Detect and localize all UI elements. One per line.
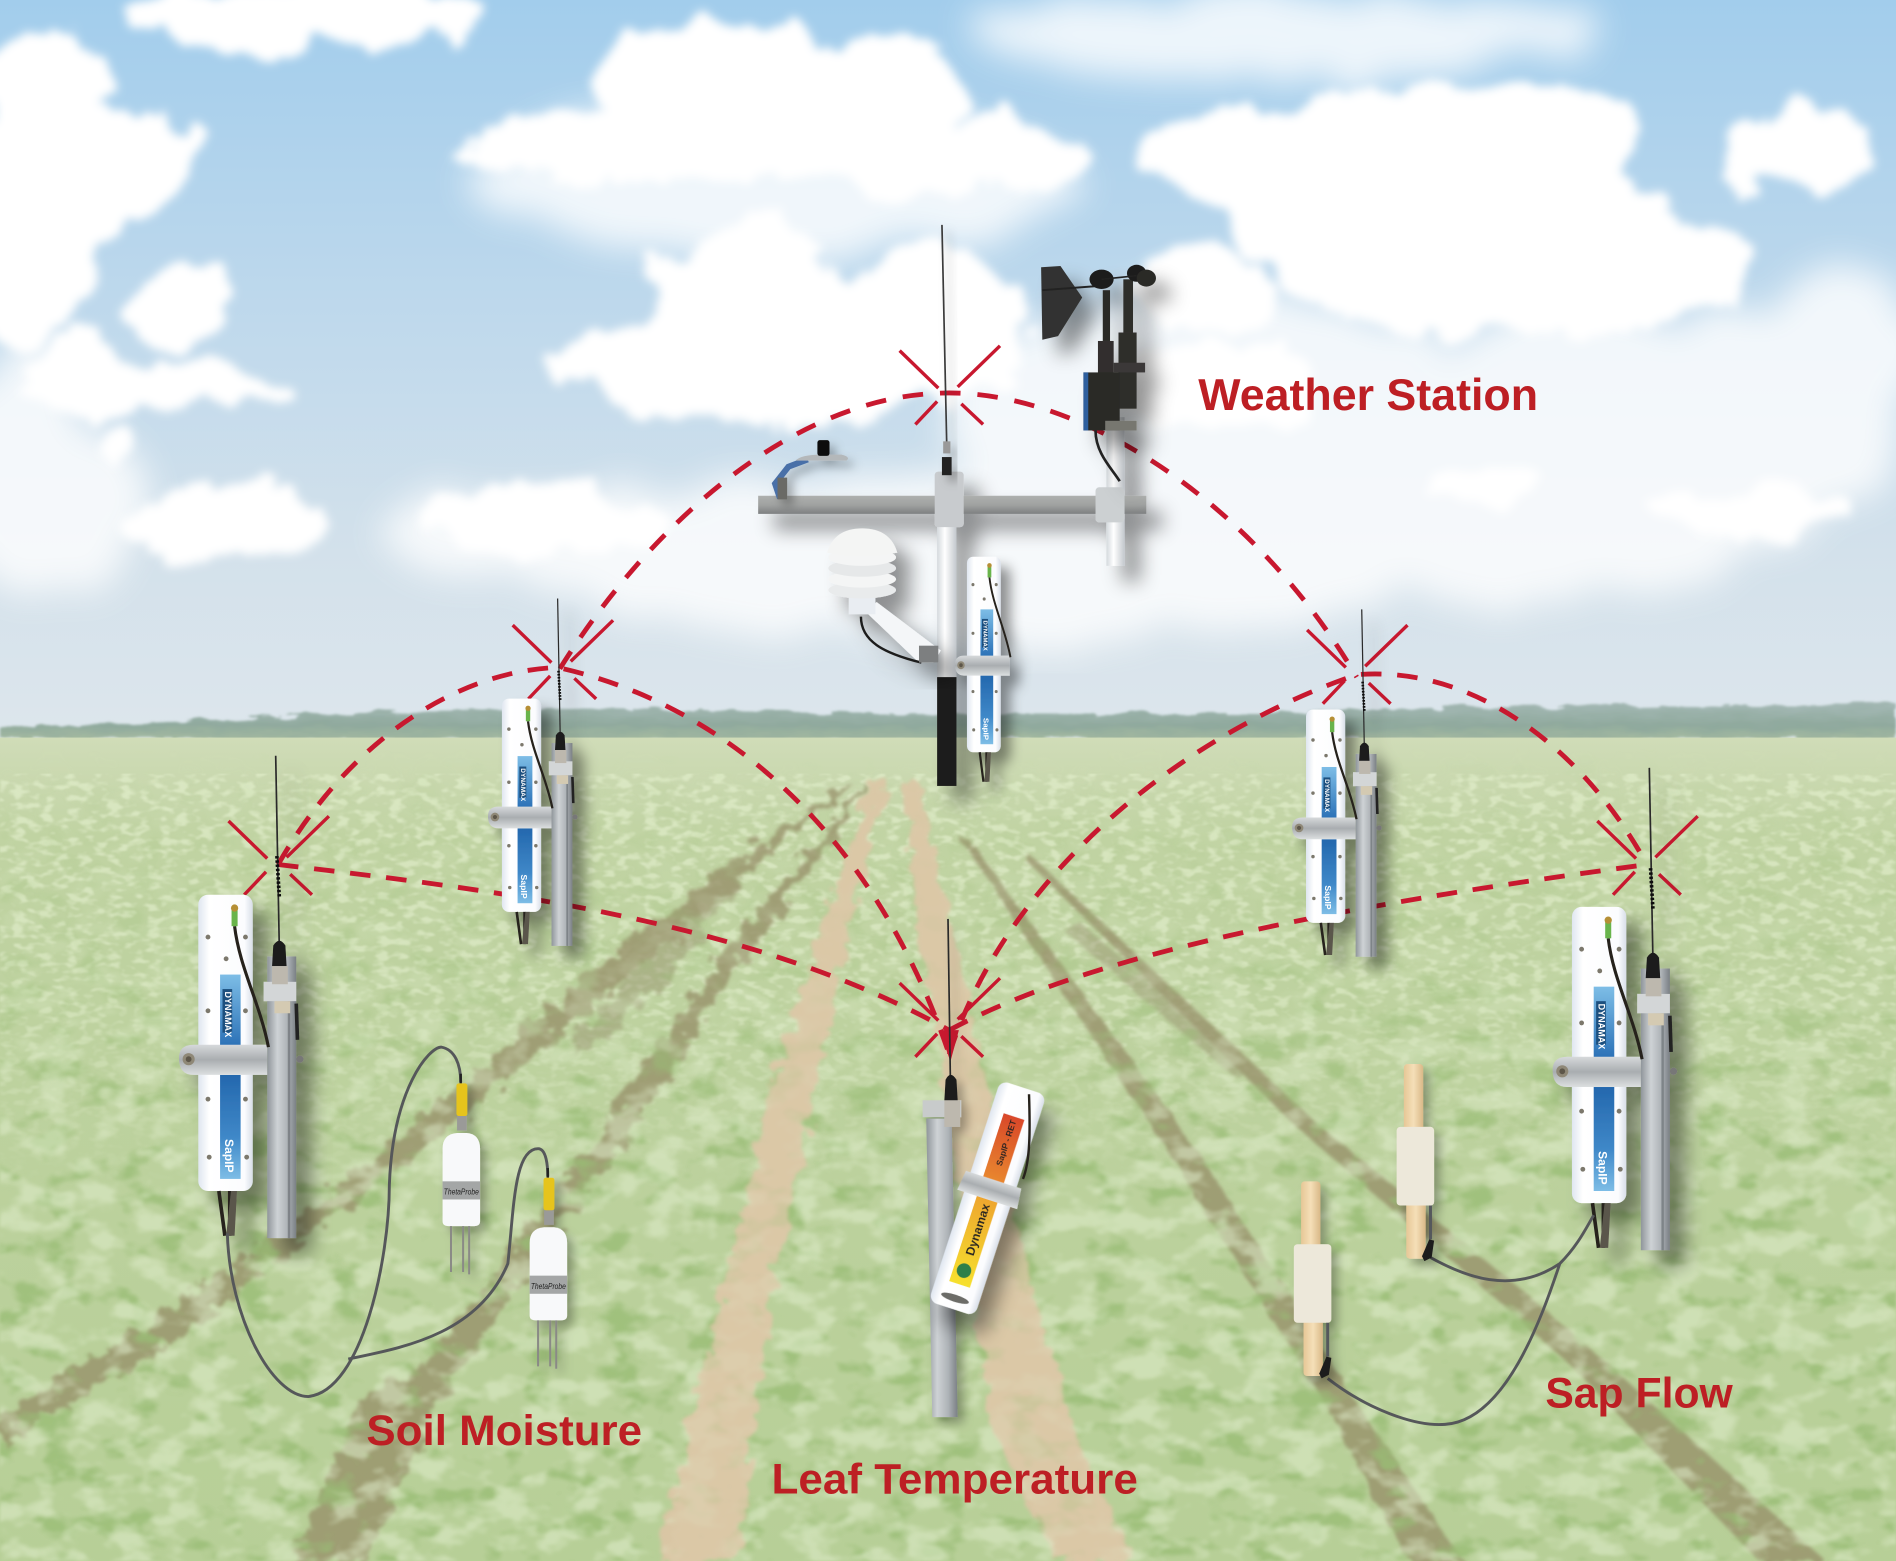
sap flow sensor 1 <box>1397 1064 1434 1261</box>
arrowhead at leaf node <box>940 1030 959 1062</box>
soil moisture probe 2 <box>530 1168 567 1369</box>
wind sensor <box>1041 265 1156 481</box>
radiation shield <box>827 528 941 663</box>
pyranometer <box>775 440 848 499</box>
label: Leaf Temperature: Leaf Temperature <box>771 1455 1138 1502</box>
leaf node cable <box>1023 1094 1030 1179</box>
sensor node: mid left <box>488 599 578 946</box>
leaf temperature node <box>922 919 1053 1417</box>
wireless link: lower left <box>278 865 949 1030</box>
wireless link: left arch <box>278 667 949 1054</box>
wireless link: right arch <box>949 674 1647 1054</box>
soil moisture cables <box>227 1047 548 1397</box>
sap flow cables <box>1328 1215 1594 1425</box>
sensor node: sap flow logger <box>1553 768 1677 1250</box>
sensor node: mid right <box>1292 609 1382 957</box>
leaf node logger <box>922 1078 1053 1318</box>
leaf node pole and antenna <box>923 919 961 1417</box>
sky background <box>0 0 1896 738</box>
wireless link: main arc to weather station <box>560 393 1357 677</box>
station data logger <box>955 557 1010 782</box>
mounting bar and mast <box>758 417 1146 786</box>
weather station <box>758 225 1156 786</box>
leaf node logger: Dynamax <box>963 1202 993 1257</box>
sensor node: soil moisture logger <box>179 756 304 1238</box>
sap flow sensor 2 <box>1294 1181 1331 1378</box>
redrawn centre paths over leaf texture <box>667 780 1131 1561</box>
crop row furrows <box>0 780 1826 1561</box>
label: Soil Moisture: Soil Moisture <box>366 1407 642 1454</box>
crop field <box>0 738 1896 1561</box>
wireless link: lower right <box>949 865 1647 1030</box>
soil moisture probe 1 <box>443 1074 480 1274</box>
signal stars at each node <box>229 346 1698 1057</box>
leaf node logger: SapIP - RET <box>994 1118 1019 1167</box>
antenna <box>942 225 952 475</box>
label: Weather Station: Weather Station <box>1198 371 1538 420</box>
clouds <box>0 0 1896 641</box>
distant treeline <box>0 704 1896 740</box>
label: Sap Flow: Sap Flow <box>1545 1369 1733 1416</box>
